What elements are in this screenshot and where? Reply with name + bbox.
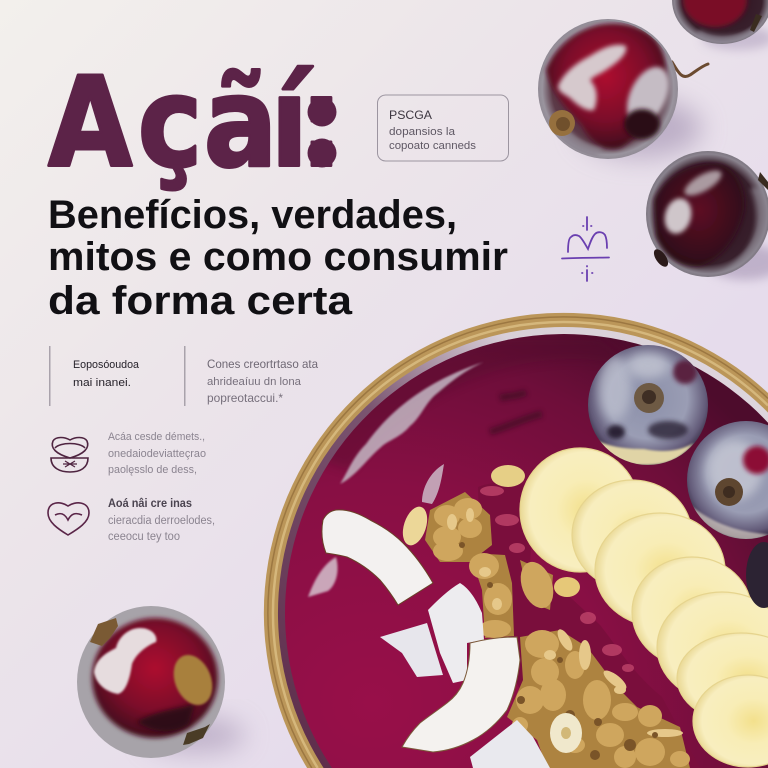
berry: right [646, 151, 768, 284]
text block: first benefit: Acáa cesde démets., [108, 431, 205, 443]
text block: second benefit: cieracdia derroelodes, [108, 515, 215, 527]
icon: heart [48, 503, 89, 535]
berries in bowl [588, 345, 768, 608]
subtitle: da forma certa [48, 279, 353, 323]
bowl rim [264, 313, 768, 768]
text block: first benefit: onedaiodeviatteçrao [108, 448, 206, 460]
callout box [378, 95, 508, 161]
stat block right: ahrideaíuu dn lona [207, 376, 302, 388]
callout box: copoato canneds [389, 140, 477, 152]
subtitle: mitos e como consumir [48, 235, 508, 279]
text block: second benefit [108, 498, 215, 543]
text block: second benefit: Aoá nâi cre inas [108, 498, 192, 510]
puree highlights [340, 362, 484, 484]
stat block left: Eoposóoudoa [73, 359, 140, 371]
berry: top right corner [672, 0, 768, 54]
acai puree [285, 334, 768, 768]
text block: first benefit [108, 431, 206, 476]
berry: top centre [538, 19, 708, 159]
berry: bottom left [77, 606, 245, 758]
icon: bowl heart [51, 438, 88, 472]
stat block right: popreotaccui.* [207, 391, 283, 405]
stat block left [49, 346, 140, 406]
text block: first benefit: paolęsslo de dess, [108, 464, 197, 476]
sauce strip [478, 483, 647, 708]
icon: purple chart symbol [562, 217, 609, 281]
stat block right: Cones creortrtaso ata [207, 357, 318, 371]
stat block left: mai inanei. [73, 377, 131, 389]
stat block right [184, 346, 318, 406]
bowl [264, 312, 768, 768]
title: Açãí: [48, 51, 343, 195]
banana slices [520, 448, 768, 767]
text block: second benefit: ceeocu tey too [108, 531, 180, 543]
granola masses [425, 492, 690, 768]
granola pieces [433, 498, 690, 768]
banana chips [402, 506, 428, 546]
callout box: dopansios la [389, 126, 456, 138]
callout box: PSCGA [389, 108, 432, 122]
subtitle [48, 193, 508, 323]
subtitle: Benefícios, verdades, [48, 193, 457, 237]
coconut pieces [322, 510, 550, 768]
